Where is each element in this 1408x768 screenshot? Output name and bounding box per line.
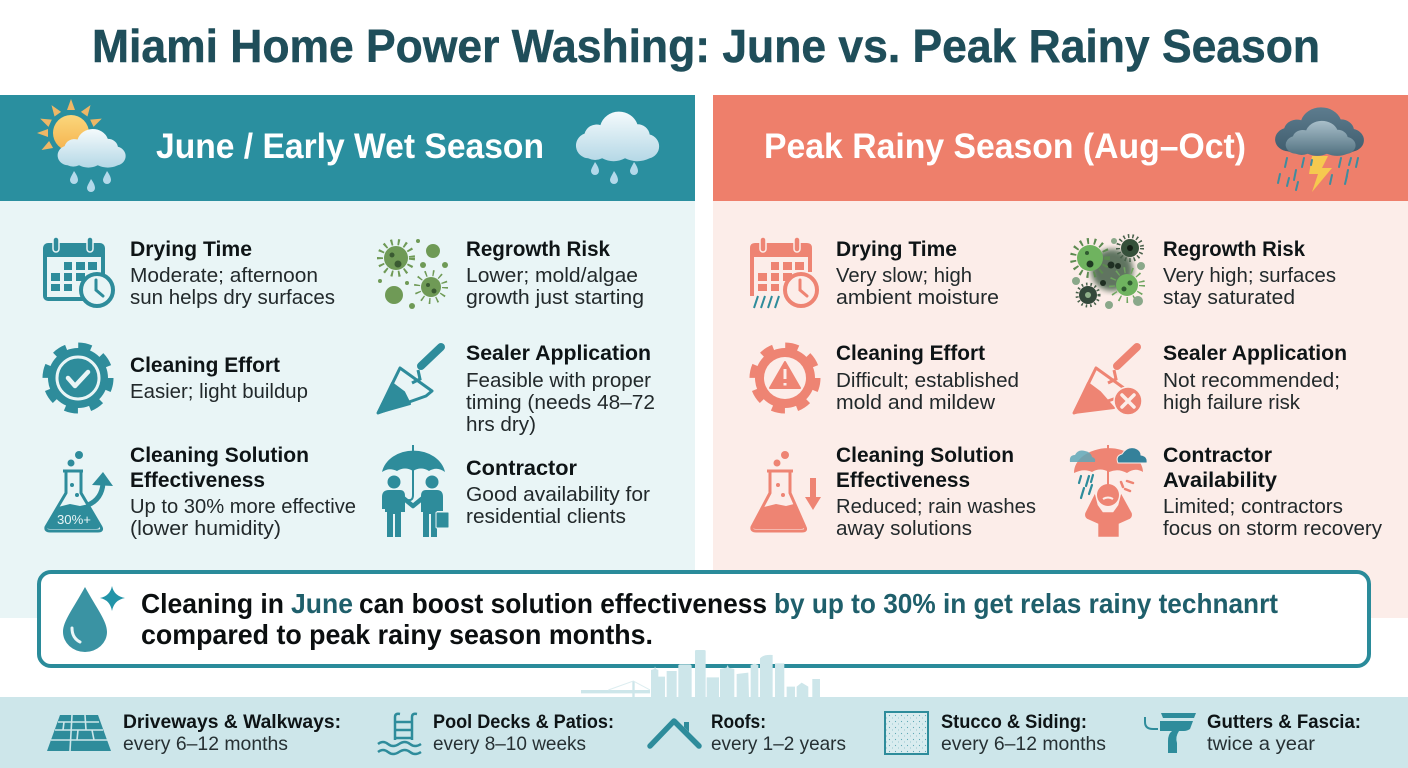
description: stay saturated xyxy=(1163,287,1295,309)
label: Pool Decks & Patios: xyxy=(433,712,614,733)
frequency: twice a year xyxy=(1207,733,1316,755)
heading: Contractor xyxy=(1163,444,1272,467)
description xyxy=(466,370,655,436)
item: cleaning solution effectiveness (June) xyxy=(46,444,356,540)
item: contractor (June) xyxy=(382,445,650,537)
label: Stucco & Siding: xyxy=(941,712,1087,733)
heading: peak: Peak Rainy Season (Aug–Oct) xyxy=(764,127,1246,166)
description: ambient moisture xyxy=(836,287,999,309)
footer item: gutters xyxy=(1145,712,1361,755)
description: Very slow; high xyxy=(836,265,972,287)
callout text xyxy=(141,588,1278,650)
label: Roofs: xyxy=(711,712,766,733)
description: Good availability for xyxy=(466,484,650,506)
icon: rain cloud xyxy=(576,112,659,184)
description: growth just starting xyxy=(466,287,644,309)
description: hrs dry) xyxy=(466,414,536,436)
description: (lower humidity) xyxy=(130,518,281,540)
description xyxy=(466,265,644,309)
callout text: June xyxy=(291,588,353,619)
icon: gear with warning xyxy=(753,346,817,410)
item: drying time (June) xyxy=(43,237,335,309)
footer item: pool decks xyxy=(378,712,614,755)
item: cleaning effort (June) xyxy=(46,346,308,410)
icon: calendar with clock and rain xyxy=(750,237,817,308)
frequency: every 1–2 years xyxy=(711,733,846,755)
label: Driveways & Walkways: xyxy=(123,712,341,733)
item: sealer application (June) xyxy=(378,342,655,436)
item: drying time (peak) xyxy=(750,237,999,309)
icon: mold spores xyxy=(378,239,448,309)
icon: stucco texture xyxy=(885,712,928,754)
description: mold and mildew xyxy=(836,392,996,414)
icon: trowel xyxy=(378,347,441,413)
title: Miami Home Power Washing: June vs. Peak Rainy Season xyxy=(92,20,1320,72)
icon: flask with down arrow xyxy=(752,451,821,531)
heading: Drying Time xyxy=(836,238,957,261)
icon: two people under umbrella xyxy=(382,445,449,537)
description: high failure risk xyxy=(1163,392,1301,414)
item: cleaning effort (peak) xyxy=(753,342,1019,414)
item: cleaning solution effectiveness (peak) xyxy=(752,444,1036,540)
description: timing (needs 48–72 xyxy=(466,392,655,414)
icon: roof xyxy=(650,721,699,746)
description xyxy=(466,484,650,528)
header band: peak xyxy=(713,95,1408,201)
item: sealer application (peak) xyxy=(1074,342,1347,415)
description: Difficult; established xyxy=(836,370,1019,392)
description: Not recommended; xyxy=(1163,370,1340,392)
description: focus on storm recovery xyxy=(1163,518,1382,540)
heading: Sealer Application xyxy=(466,342,651,365)
icon: calendar with clock xyxy=(43,237,113,306)
callout text: Cleaning in xyxy=(141,588,284,619)
footer band xyxy=(0,650,1408,768)
icon: sun behind rain cloud xyxy=(37,99,126,192)
item: regrowth risk (June) xyxy=(378,238,644,309)
description: Reduced; rain washes xyxy=(836,496,1036,518)
description xyxy=(836,265,999,309)
icon: stressed person under umbrella in rain xyxy=(1070,445,1147,537)
description: Lower; mold/algae xyxy=(466,265,638,287)
heading: Regrowth Risk xyxy=(466,238,610,261)
heading xyxy=(1163,444,1277,492)
heading: Cleaning Solution xyxy=(836,444,1014,467)
panel: peak rainy season xyxy=(713,95,1408,618)
footer item: driveways xyxy=(47,712,341,755)
skyline xyxy=(581,650,820,698)
description: sun helps dry surfaces xyxy=(130,287,335,309)
description: Up to 30% more effective xyxy=(130,496,356,518)
description xyxy=(130,496,356,540)
description: Limited; contractors xyxy=(1163,496,1343,518)
description: away solutions xyxy=(836,518,972,540)
callout xyxy=(39,572,1369,666)
icon: flask with up arrow: 30%+ xyxy=(57,513,91,527)
icon: gear with check xyxy=(46,346,110,410)
heading: Effectiveness xyxy=(836,469,970,492)
icon: storm cloud with lightning xyxy=(1275,107,1364,192)
frequency: every 8–10 weeks xyxy=(433,733,586,755)
description xyxy=(1163,370,1340,414)
description xyxy=(836,496,1036,540)
heading: Effectiveness xyxy=(130,469,265,492)
icon: water drop with sparkle xyxy=(63,586,125,652)
description: residential clients xyxy=(466,506,626,528)
panel: June / early wet season xyxy=(0,95,695,618)
icon: trowel with X xyxy=(1074,347,1142,415)
heading: Cleaning Effort xyxy=(130,354,280,377)
callout text: compared to peak rainy season months. xyxy=(141,619,653,650)
frequency: every 6–12 months xyxy=(123,733,288,755)
icon: pavers xyxy=(47,715,111,751)
description xyxy=(836,370,1019,414)
heading: Regrowth Risk xyxy=(1163,238,1305,261)
icon: flask with up arrow xyxy=(46,451,113,531)
description xyxy=(130,265,335,309)
description: Moderate; afternoon xyxy=(130,265,318,287)
frequency: every 6–12 months xyxy=(941,733,1106,755)
footer item: stucco xyxy=(885,712,1106,755)
icon: gutter and downspout xyxy=(1145,713,1196,753)
callout text: by up to 30% in get relas rainy technanrt xyxy=(774,588,1278,619)
heading: Contractor xyxy=(466,457,577,480)
icon: pool ladder and water xyxy=(378,714,421,754)
callout text: can boost solution effectiveness xyxy=(359,588,767,619)
description: Feasible with proper xyxy=(466,370,651,392)
description: Very high; surfaces xyxy=(1163,265,1336,287)
label: Gutters & Fascia: xyxy=(1207,712,1361,733)
description xyxy=(1163,265,1336,309)
heading: Sealer Application xyxy=(1163,342,1347,365)
heading xyxy=(130,444,309,492)
description xyxy=(1163,496,1382,540)
heading: Cleaning Effort xyxy=(836,342,985,365)
footer item: roofs xyxy=(650,712,846,755)
item: regrowth risk (peak) xyxy=(1072,236,1336,309)
description: Easier; light buildup xyxy=(130,381,308,403)
heading: Cleaning Solution xyxy=(130,444,309,467)
heading: Drying Time xyxy=(130,238,252,261)
icon: heavy mold spores xyxy=(1072,236,1145,309)
header band: June xyxy=(0,95,695,201)
heading: Availability xyxy=(1163,469,1277,492)
heading xyxy=(836,444,1014,492)
item: contractor availability (peak) xyxy=(1070,444,1382,540)
heading: June: June / Early Wet Season xyxy=(156,127,544,166)
